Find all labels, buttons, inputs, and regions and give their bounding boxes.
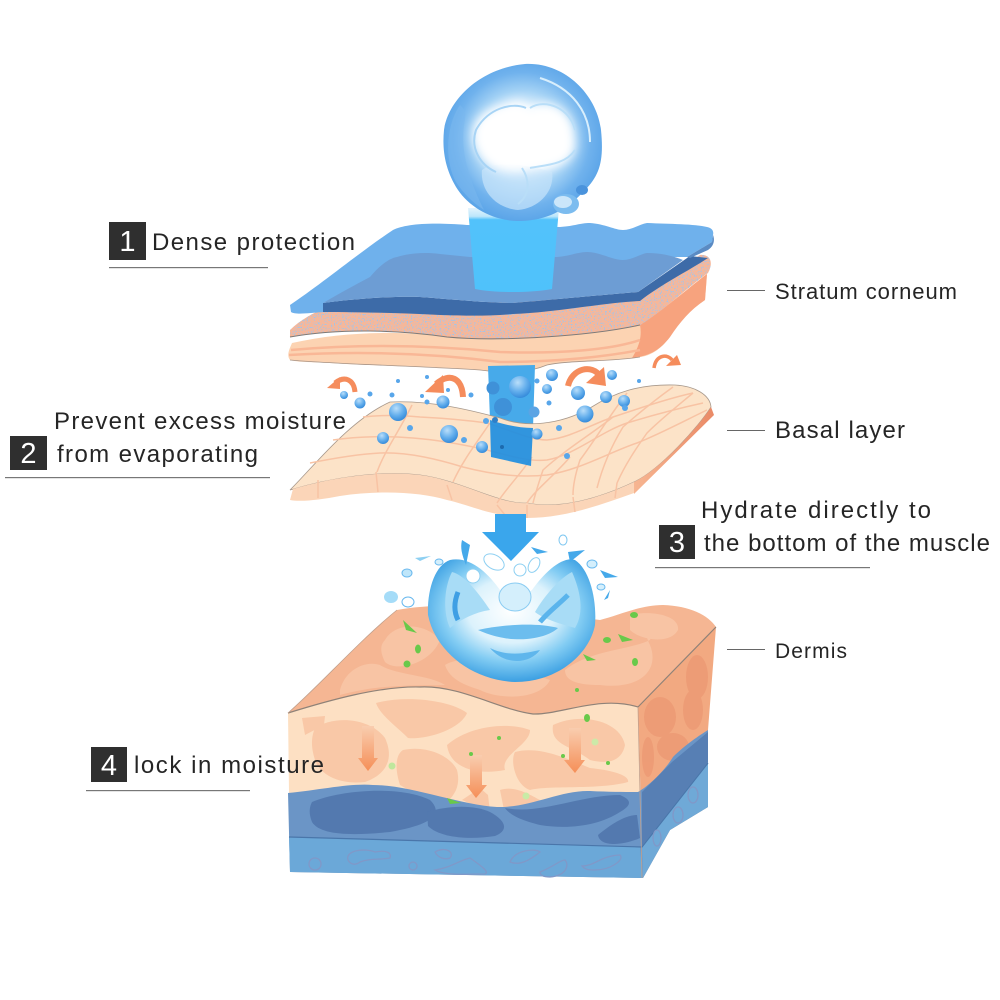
green particles: [388, 612, 638, 804]
label: 3 Hydrate directly to the bottom of the muscle: the bottom of the muscle: [704, 530, 990, 557]
top surface blobs: [340, 613, 678, 697]
orange down arrows: [358, 726, 585, 798]
label: Dermis: Dermis: [775, 640, 847, 663]
dark blue patches: [310, 732, 708, 846]
grid lines: [310, 387, 707, 518]
label: 2 Prevent excess moisture from evaporating: [5, 408, 346, 478]
lower peach layer: [288, 274, 707, 372]
block edge lines: [288, 627, 716, 714]
icon: orange evaporation arrows: [327, 355, 681, 397]
panel: stratum corneum layers: [288, 223, 714, 372]
label: 4 lock in moisture: [86, 747, 324, 791]
label: Stratum corneum: Stratum corneum: [775, 279, 957, 304]
label: 2 Prevent excess moisture from evaporating: from evaporating: [57, 441, 258, 468]
panel: dermis skin block: [288, 605, 716, 878]
label: 1 Dense protection: 1: [119, 226, 136, 258]
label: 2 Prevent excess moisture from evaporating: 2: [20, 438, 37, 470]
icon: blue down arrow: [482, 514, 539, 561]
lower blue band: [289, 837, 643, 878]
lower column overlay: [490, 420, 533, 466]
panel: basal layer sheet: [290, 385, 714, 518]
label: 4 lock in moisture: 4: [101, 750, 117, 782]
label: 2 Prevent excess moisture from evaporating: Prevent excess moisture: [54, 408, 346, 435]
icon: blue column through basal layer upper: [488, 365, 535, 428]
translucent top sheet: [290, 223, 713, 314]
speckled layer: [290, 255, 711, 339]
blue dermis band: [288, 730, 708, 878]
front face: [288, 687, 642, 878]
right side: [638, 627, 716, 878]
label: 3 Hydrate directly to the bottom of the muscle: Hydrate directly to: [701, 497, 931, 524]
label: 4 lock in moisture: lock in moisture: [134, 752, 324, 779]
shape: blue column through stratum corneum: [468, 208, 559, 292]
label: 3 Hydrate directly to the bottom of the muscle: [655, 497, 990, 568]
top surface: [288, 605, 716, 714]
label: Basal layer: Basal layer: [775, 417, 905, 444]
icon: splashing water drop: [384, 535, 618, 682]
dark blue band: [323, 256, 708, 316]
label: Dermis: [727, 640, 847, 663]
label: 1 Dense protection: [109, 222, 355, 268]
front blobs: [302, 699, 628, 815]
label: 1 Dense protection: Dense protection: [152, 229, 355, 256]
icon: blue water sphere: [443, 64, 602, 221]
label: 3 Hydrate directly to the bottom of the muscle: 3: [669, 527, 685, 559]
bubbles: [340, 369, 641, 459]
